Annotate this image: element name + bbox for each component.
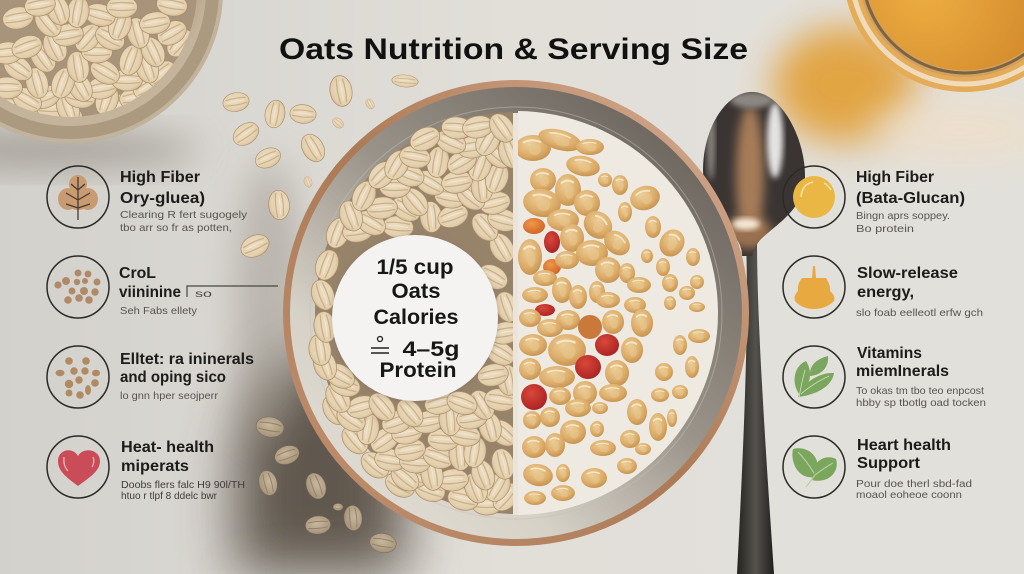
left half: dry rolled oats: [308, 112, 513, 516]
left item 2: CroL: [119, 265, 156, 282]
right item 3: [783, 345, 986, 409]
right item 1: High Fiber: [856, 169, 934, 186]
icon: heart: [47, 436, 109, 498]
right item 1: (Bata-Glucan): [856, 190, 965, 207]
left item 4: Heat- health: [121, 439, 214, 456]
left item 1: high fiber: Clearing R fert sugogely: [120, 209, 248, 221]
right item 2: slo foab eelleotl erfw gch: [856, 307, 983, 319]
serving size badge: Protein: [380, 359, 456, 382]
left item 3: and oping sico: [120, 369, 226, 386]
icon: leaves: [783, 346, 845, 408]
left item 4: miperats: [121, 458, 189, 475]
icon: grains: [47, 346, 109, 408]
right item 2: Slow-release: [857, 265, 958, 282]
icon: scale symbol: [371, 336, 389, 353]
right item 1: [783, 166, 965, 235]
right item 4: [783, 436, 972, 501]
left item 4: htuo r tlpf 8 ddelc bwr: [121, 490, 217, 502]
spoon: [700, 90, 810, 574]
main bowl: [283, 80, 749, 546]
right item 3: miemInerals: [856, 363, 949, 380]
serving size badge: Oats: [392, 280, 440, 303]
loose oat flakes: [221, 74, 419, 555]
right item 1: Bingn aprs soppey.: [856, 210, 950, 222]
serving size badge: Calories: [374, 306, 458, 329]
right item 2: [783, 256, 983, 319]
left item 2: so: [195, 288, 212, 300]
left item 2: Seh Fabs ellety: [120, 305, 198, 317]
right item 1: Bo protein: [856, 223, 914, 235]
serving size badge: 1/5 cup: [376, 256, 454, 279]
left item 3: [47, 346, 254, 408]
left item 1: high fiber: tbo arr so fr as potten,: [120, 222, 232, 234]
left item 2: [47, 256, 278, 318]
title: Oats Nutrition & Serving Size: [279, 33, 748, 66]
right item 3: Vitamins: [857, 345, 922, 362]
left item 3: Elltet: ra ininerals: [120, 351, 254, 368]
serving size badge: 4–5g: [402, 338, 460, 361]
right item 4: Pour doe therl sbd-fad: [856, 478, 972, 490]
right item 3: To okas tm tbo teo enpcost: [856, 385, 984, 397]
left item 1: high fiber: High Fiber: [120, 169, 200, 186]
right item 2: energy,: [857, 284, 914, 301]
left item 4: [47, 436, 245, 502]
icon: heart-shaped leaves: [783, 436, 845, 498]
icon: leaf tree: [47, 166, 109, 228]
left item 1: high fiber: [47, 166, 248, 234]
right item 4: moaol eoheoe coonn: [856, 489, 962, 501]
left item 3: lo gnn hper seojperr: [120, 390, 219, 402]
icon: energy: [783, 256, 845, 318]
left item 4: Doobs flers falc H9 90l/TH: [121, 479, 245, 491]
glass of orange juice: [843, 0, 1024, 92]
right item 4: Heart health: [857, 437, 951, 454]
icon: golden drop: [783, 166, 845, 228]
top-left bowl of oats: [0, 0, 223, 143]
icon: dots: [47, 256, 109, 318]
right half: cooked oats in milk: [518, 111, 718, 515]
left item 1: high fiber: Ory-gluea): [120, 190, 205, 207]
right item 4: Support: [857, 455, 920, 472]
left item 2: viininine: [119, 284, 181, 301]
serving size badge: [332, 235, 498, 402]
right item 3: hbby sp tbotlg oad tocken: [856, 397, 986, 409]
